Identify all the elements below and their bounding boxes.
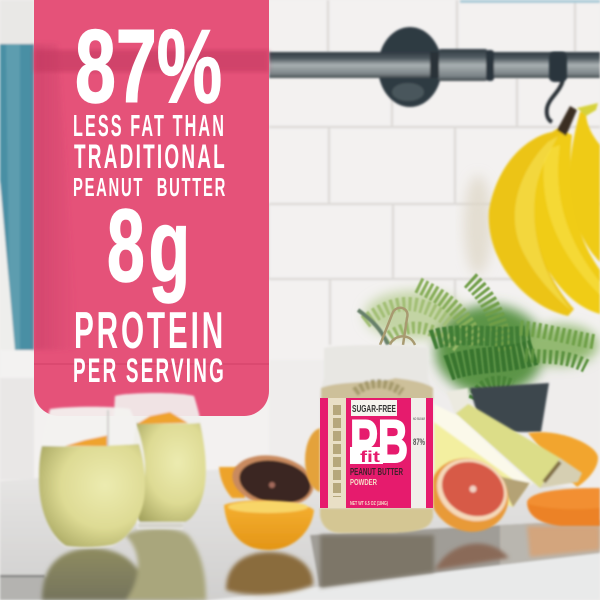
glass of smoothie, front — [39, 407, 145, 548]
product name — [350, 467, 403, 507]
orange wedge at right — [528, 432, 598, 487]
sugar-free tag: SUGAR-FREE — [352, 403, 396, 415]
orange jar cap — [527, 488, 600, 526]
bananas hanging from hook — [489, 52, 600, 316]
jar glass and powder — [320, 345, 433, 533]
caption: less fat than traditional peanut butter — [73, 108, 227, 202]
counter surface — [0, 463, 600, 600]
product name: NET WT 6.5 OZ (184G) — [350, 501, 388, 507]
product name: PEANUT BUTTER — [350, 467, 403, 478]
PB fit logo — [350, 408, 408, 475]
lower wall and back ledge — [269, 360, 600, 495]
caption: protein per serving: PROTEIN — [74, 302, 226, 360]
caption: protein per serving — [73, 302, 226, 390]
caption: less fat than traditional peanut butter: PEANUT BUTTER — [73, 172, 227, 202]
pink stat panel — [34, 0, 269, 416]
orange behind grapefruit — [219, 467, 245, 498]
banana shadow on wall — [464, 175, 492, 275]
caption: less fat than traditional peanut butter: TRADITIONAL — [74, 138, 227, 176]
caption: protein per serving: PER SERVING — [73, 352, 226, 390]
measuring scoop handle — [380, 308, 415, 345]
product name: POWDER — [350, 478, 377, 487]
teal picture frame at left — [0, 0, 34, 480]
orange behind jar — [305, 428, 339, 492]
lemon half — [224, 500, 314, 550]
jar label — [320, 398, 433, 508]
headline stat: 87%: 87% — [75, 9, 222, 125]
side claim: NO SUGAR — [413, 416, 425, 421]
plant — [358, 280, 598, 400]
peanut butter powder jar — [320, 308, 433, 533]
pineapple wedge, back — [447, 388, 582, 488]
reflections on counter — [42, 526, 600, 600]
plant pot — [470, 383, 549, 432]
dark grapefruit half — [228, 449, 318, 513]
headline stat: 8g: 8g — [107, 188, 194, 303]
glass of smoothie, back — [113, 393, 206, 529]
caption: less fat than traditional peanut butter: LESS FAT THAN — [73, 108, 226, 143]
pink grapefruit half — [418, 445, 520, 545]
PB fit logo: PB — [350, 408, 408, 475]
pineapple wedge, front — [434, 404, 532, 507]
PB fit logo: fit — [360, 449, 381, 466]
pipe rail with wall flange — [269, 27, 600, 107]
side claim — [413, 416, 425, 447]
side claim: 87% — [413, 437, 425, 447]
